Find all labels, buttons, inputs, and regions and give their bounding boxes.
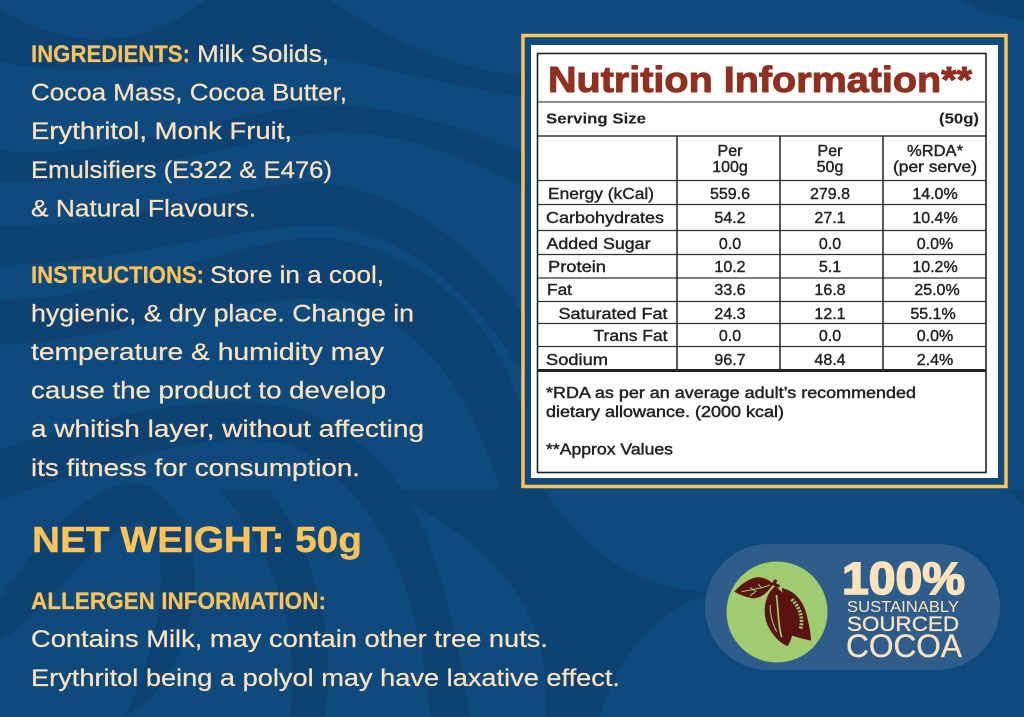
ingredients text block: Milk Solids,	[197, 41, 329, 68]
allergen information text block	[31, 588, 620, 692]
table row labels: Trans Fat	[594, 328, 668, 345]
per 100g values: 33.6	[714, 282, 746, 299]
per 50g values: 5.1	[819, 259, 841, 276]
per 100g values: 559.6	[710, 186, 750, 203]
instructions text block: a whitish layer, without affecting	[31, 416, 424, 443]
table row labels: Added Sugar	[546, 236, 651, 253]
ingredients text block: & Natural Flavours.	[31, 196, 256, 222]
percent RDA values: 10.4%	[912, 210, 958, 227]
column headers: 100g	[712, 159, 748, 176]
percent RDA values: 25.0%	[914, 282, 960, 299]
ingredients text block: INGREDIENTS:	[31, 41, 190, 68]
per 50g values: 12.1	[814, 306, 846, 323]
ingredients text block: Cocoa Mass, Cocoa Butter,	[31, 80, 347, 106]
ingredients text block: Emulsifiers (E322 & E476)	[31, 157, 332, 184]
instructions text block: temperature & humidity may	[31, 339, 384, 366]
per 50g values: 279.8	[810, 186, 850, 203]
instructions text block: INSTRUCTIONS:	[31, 262, 204, 289]
per 100g values	[710, 186, 750, 369]
percent RDA values	[910, 186, 960, 369]
per 100g values: 10.2	[714, 259, 746, 276]
serving size row	[546, 110, 979, 128]
table row labels	[546, 186, 668, 369]
instructions text block: its fitness for consumption.	[31, 455, 360, 482]
icon: cocoa pod on green circle	[726, 562, 828, 662]
column headers: %RDA*	[907, 143, 963, 160]
table outline	[538, 54, 986, 472]
badge text: COCOA	[846, 628, 963, 664]
column headers: (per serve)	[893, 159, 977, 176]
table row labels: Protein	[548, 259, 606, 276]
percent RDA values: 55.1%	[910, 306, 956, 323]
per 100g values: 96.7	[714, 352, 746, 369]
percent RDA values: 0.0%	[917, 328, 953, 345]
table rules	[538, 102, 986, 370]
serving size row: (50g)	[939, 110, 979, 128]
per 50g values: 0.0	[819, 328, 841, 345]
table row labels: Saturated Fat	[558, 306, 668, 323]
badge: sustainably sourced cocoa	[705, 544, 1000, 670]
instructions text block: Store in a cool,	[210, 262, 384, 289]
allergen information text block: Erythritol being a polyol may have laxative effect.	[31, 665, 620, 692]
badge text: SUSTAINABLY	[847, 599, 959, 616]
percent RDA values: 2.4%	[917, 352, 953, 369]
table row labels: Sodium	[546, 352, 608, 369]
table footnotes: **Approx Values	[546, 442, 673, 458]
instructions text block: hygienic, & dry place. Change in	[31, 300, 414, 328]
per 50g values: 16.8	[814, 282, 846, 299]
column headers: 50g	[817, 159, 843, 176]
column headers: Per	[718, 143, 743, 160]
percent RDA values: 10.2%	[912, 259, 958, 276]
white card	[531, 45, 998, 478]
column headers	[712, 143, 977, 176]
allergen information text block: ALLERGEN INFORMATION:	[31, 588, 326, 615]
badge text: SOURCED	[847, 613, 959, 636]
serving size row: Serving Size	[546, 110, 646, 128]
per 50g values	[810, 186, 850, 369]
allergen information text block: Contains Milk, may contain other tree nuts.	[31, 626, 548, 653]
ingredients text block: Erythritol, Monk Fruit,	[31, 118, 292, 145]
per 100g values: 24.3	[714, 306, 746, 323]
table footnotes: *RDA as per an average adult’s recommended	[546, 385, 916, 402]
badge text: 100%	[842, 553, 965, 604]
per 100g values: 0.0	[719, 328, 741, 345]
net weight heading: NET WEIGHT: 50g	[32, 519, 362, 560]
ingredients text block	[31, 41, 347, 222]
nutrition title: Nutrition Information**	[548, 59, 972, 100]
per 50g values: 48.4	[814, 352, 846, 369]
panel: nutrition information	[523, 36, 1006, 486]
table row labels: Carbohydrates	[546, 210, 664, 227]
badge text	[842, 553, 965, 664]
per 50g values: 0.0	[819, 236, 841, 253]
percent RDA values: 0.0%	[917, 236, 953, 253]
table row labels: Energy (kCal)	[548, 186, 654, 203]
gold frame	[523, 36, 1006, 486]
instructions text block	[31, 262, 424, 482]
per 100g values: 0.0	[719, 236, 741, 253]
per 50g values: 27.1	[814, 210, 846, 227]
column headers: Per	[818, 143, 843, 160]
badge pill	[705, 544, 1000, 670]
instructions text block: cause the product to develop	[31, 378, 386, 404]
per 100g values: 54.2	[714, 210, 746, 227]
percent RDA values: 14.0%	[912, 186, 958, 203]
table footnotes	[546, 385, 916, 458]
table row labels: Fat	[547, 282, 573, 299]
table footnotes: dietary allowance. (2000 kcal)	[546, 404, 784, 421]
